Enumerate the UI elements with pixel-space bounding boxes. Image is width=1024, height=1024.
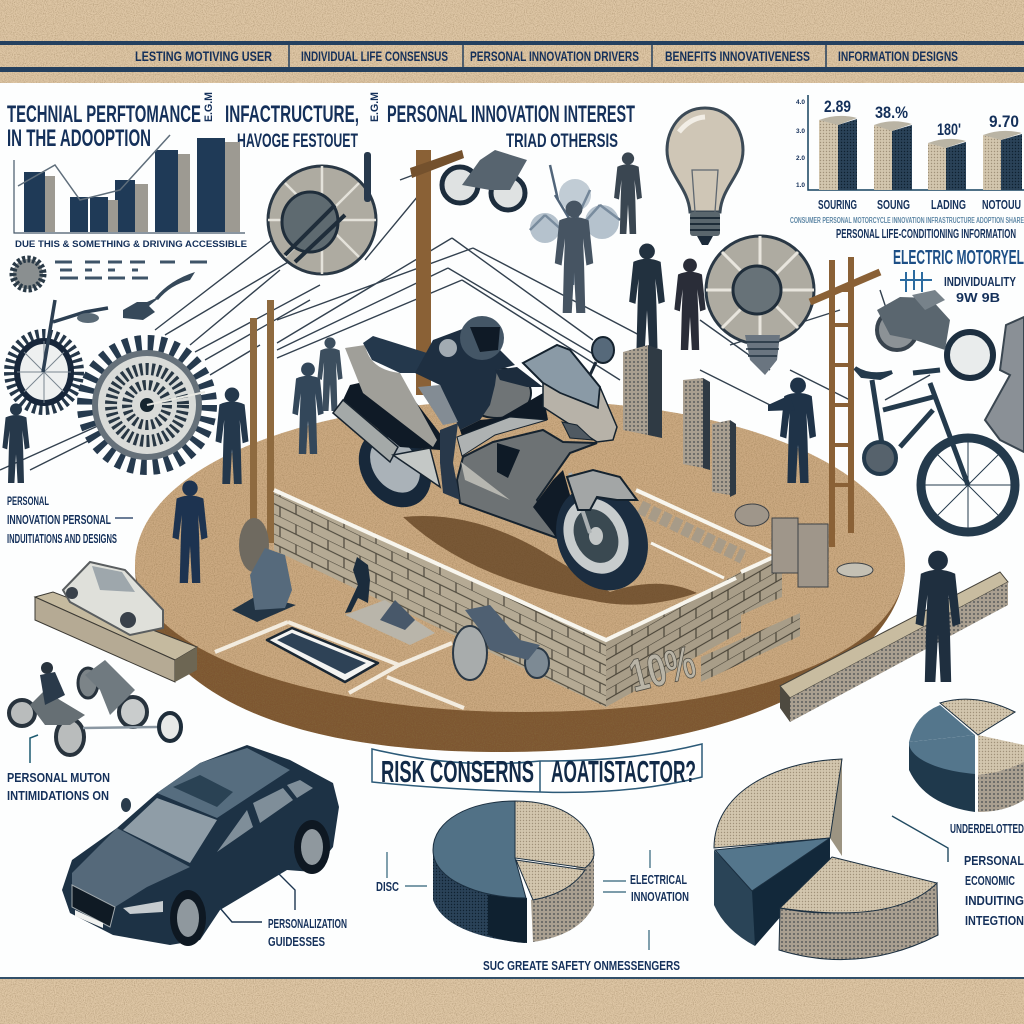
pie 1 label left: DISC [376,879,399,894]
gear right [706,236,814,375]
bar 3 [928,139,966,190]
wheel left small with fork [12,300,108,407]
title: IN THE ADOOPTION [7,125,151,152]
nav label 1: LESTING MOTIVING USER [135,48,272,64]
bar labels: SOURING [818,197,857,212]
stone wall right [780,572,1008,722]
ladder pole right [810,257,880,547]
pie chart 2 [714,759,938,960]
platform white lines [215,622,464,708]
nav label 2: INDIVIDUAL LIFE CONSENSUS [301,48,448,64]
headlight [562,422,593,440]
mirror [590,337,614,375]
statue [232,518,296,622]
banner: risk concerns: AOATISTACTOR? [551,754,696,789]
stone block left [35,592,197,682]
right edge machine [985,317,1024,452]
subheading left: HAVOGE FESTOUET [237,131,358,152]
left leader [30,735,38,763]
utility pole center [410,150,464,395]
pie 1 label right [603,850,689,950]
pie chart 3 [909,699,1024,812]
windshield [123,798,217,863]
person with arm [768,378,816,483]
electric motorcycle sub text: 9W 9B [956,290,1000,305]
roof [157,748,290,818]
bar 2 [874,121,912,190]
left bar chart [14,135,245,233]
right 3D bar chart: 1.0 [796,183,806,189]
top beige band [0,0,1024,83]
person female 1 [292,362,324,454]
right 3D bar chart: LADING [931,197,966,212]
sunroof [173,775,233,807]
car leader line [220,873,295,922]
people top pair [614,152,642,234]
gear top [268,152,376,274]
rear wheel [294,820,330,874]
caption left: INTIMIDATIONS ON [7,788,109,803]
person suit [172,481,208,583]
small motorcycle left 2 [78,660,147,727]
pie 1 label left [376,852,427,894]
car caption [268,916,347,949]
side windows [217,780,313,852]
caption left [7,770,110,803]
front wheel [170,890,206,946]
bottom beige band [0,979,1024,1024]
nav label 4: BENEFITS INNOVATIVENESS [665,48,810,64]
bicycle right [855,368,1015,532]
banner: risk concerns [372,744,702,792]
title: TECHNIAL PERFTOMANCE [7,101,201,128]
person by pole [216,387,248,484]
mini legend rows [55,262,207,278]
tail and seat [345,336,437,447]
right 3D bar chart: 3.0 [796,129,806,135]
engine dark [460,393,548,436]
pie 2 label [964,853,1024,928]
rear wheel [344,415,446,521]
right 3D bar chart: 180' [937,120,961,139]
mirror [121,798,131,812]
ground line [83,727,157,728]
bottom band rule [0,977,1024,979]
small motorcycle left 1 [9,662,85,755]
brick wall [274,490,800,707]
dark car [62,745,339,946]
light bulb icon [667,108,743,245]
front wheel [539,470,665,606]
motorcycle top [442,150,527,210]
standing person 1 [629,244,665,348]
pie chart 1 [433,801,594,943]
icon: small floating motorcycles [123,272,195,320]
car caption: PERSONALIZATION [268,916,347,931]
person far left [2,403,30,483]
pole pair left [250,300,274,543]
navigation header [0,41,1024,72]
bar values: 2.89 [824,97,851,116]
silver car [63,562,163,635]
left chart caption: DUE THIS & SOMETHING & DRIVING ACCESSIBLE [15,239,247,250]
car caption: GUIDESSES [268,934,325,949]
person right [916,551,960,682]
bar 4 [983,131,1022,190]
front fender [567,470,637,510]
right 3D bar chart: 2.0 [796,156,806,162]
pie 1 label right: INNOVATION [631,889,689,904]
left text block: INNOVATION PERSONAL [7,512,111,527]
subheading right: TRIAD OTHERSIS [506,131,618,152]
central motorcycle [333,316,697,606]
title: INFACTRUCTURE, [225,101,359,128]
windshield [523,345,600,408]
title [7,92,635,152]
left text block [7,494,133,546]
left text block: INDUITIATIONS AND DESIGNS [7,531,117,546]
small wheel [159,713,181,741]
pie 1 label right: ELECTRICAL [630,872,687,887]
fairing [457,430,597,538]
gear left large [86,344,208,466]
shadow [403,516,697,605]
rider [415,316,543,500]
small stones [735,504,873,587]
number plate [75,910,103,928]
front fork [570,473,590,533]
y axis ticks: 4.0 [796,100,806,106]
left text block: PERSONAL [7,494,49,508]
wall number: 10% [624,635,700,702]
tank [463,368,531,418]
grille [72,885,115,927]
pillars [623,345,736,497]
rear frame [343,375,445,450]
crouching figure with rubble [345,557,435,645]
pie 1 caption: SUC GREATE SAFETY ONMESSENGERS [483,958,680,973]
light fairing stripe [461,462,510,500]
hood [72,828,190,907]
banner: risk concerns: RISK CONSERNS [381,754,534,789]
right 3D bar chart: 9.70 [989,112,1019,131]
icon: small gear [13,259,43,289]
electric motorcycle sub text [900,270,1016,305]
right 3D bar chart [796,95,1024,212]
exhaust [333,400,440,487]
front dark [533,470,570,538]
wires [0,165,930,470]
silver strip [457,417,547,456]
right 3D bar chart: 38.% [875,103,908,122]
tablet icon [267,628,378,682]
standing person 2 [674,258,706,350]
person female 2 [317,337,343,411]
nav label 5: INFORMATION DESIGNS [838,48,958,64]
tree and figure [530,165,620,313]
title: PERSONAL INNOVATION INTEREST [387,101,635,128]
nav label 3: PERSONAL INNOVATION DRIVERS [470,48,639,64]
fairing vent [497,443,520,478]
body [62,745,339,945]
right 3D bar chart: SOUNG [877,197,910,212]
title: E.G.M [369,92,381,122]
motorcycle right [877,290,993,378]
platform [135,400,905,752]
pie 2 leader [892,816,948,862]
nose [543,383,617,442]
caption left: PERSONAL MUTON [7,770,110,785]
small motorcycle on platform [453,605,549,680]
headlight [123,901,163,914]
title: E.G.M [203,92,215,122]
bar 1 [819,116,857,190]
